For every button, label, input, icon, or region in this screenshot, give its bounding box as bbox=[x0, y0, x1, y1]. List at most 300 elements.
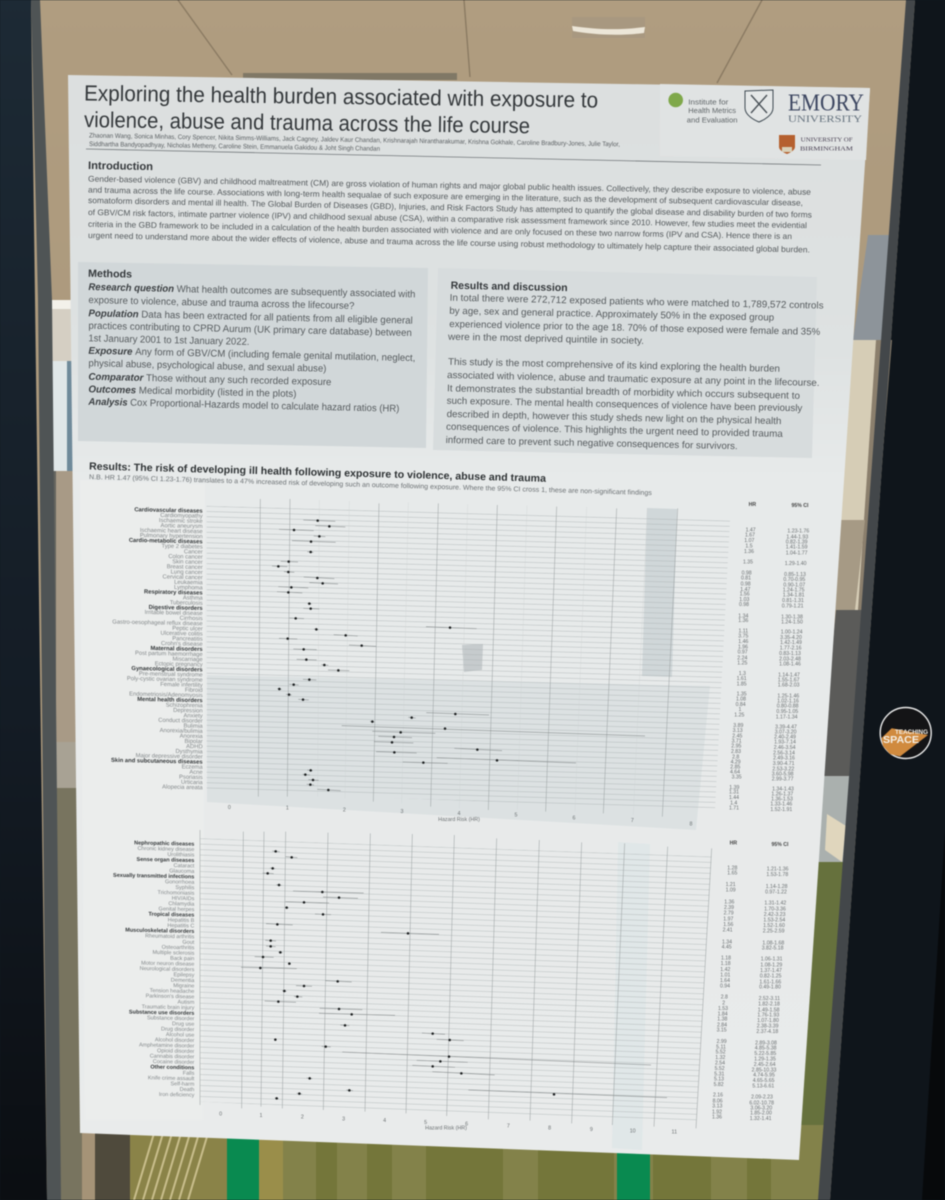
plot 2 outcome labels: Self-harm bbox=[170, 1081, 195, 1088]
text block: introduction: urgent need to understand more about the wider effects of violence, abuse and trauma across the life course using robust methodology to ultimately help capture their associated global burden. bbox=[88, 231, 810, 254]
plot 2 CI column: 2.45-2.64 bbox=[754, 1062, 776, 1068]
text block: results: associated with violence, abuse and traumatic exposure at any point in the lifecourse. bbox=[447, 370, 820, 389]
plot 1 HR column: 1.44 bbox=[729, 795, 739, 801]
plot 2 outcome labels: Musculoskeletal disorders bbox=[125, 928, 194, 935]
plot 1 HR column: 4.29 bbox=[731, 760, 741, 766]
plot 1 CI column: 1.24-1.75 bbox=[783, 588, 805, 594]
plot 1 vertical grid bbox=[258, 499, 678, 817]
plot 2 outcome labels: Trichomoniasis bbox=[158, 890, 195, 897]
plot 1 outcome labels: Ischaemic heart disease bbox=[140, 528, 203, 535]
plot 2 x axis bbox=[219, 1111, 677, 1136]
plot 1 CI column: 1.00-1.24 bbox=[781, 630, 803, 636]
plot 2 outcome labels: Cataract bbox=[174, 863, 195, 870]
plot 1 outcome labels: Aortic aneurysm bbox=[161, 523, 203, 530]
plot 2 HR column: 1.56 bbox=[723, 922, 733, 928]
logo: Institute for Health Metrics and Evaluation: Institute for bbox=[688, 98, 729, 107]
plot 2 outcome labels: Substance use disorders bbox=[129, 1009, 194, 1017]
text block: methods: Analysis Cox Proportional-Hazards model to calculate hazard ratios (HR) bbox=[87, 397, 400, 415]
heading: Introduction: Introduction bbox=[88, 160, 153, 173]
plot 2 CI column: 5.13-6.61 bbox=[752, 1083, 774, 1089]
text block: introduction: Gender-based violence (GBV) and childhood maltreatment (CM) are gross violation of human rights and major global public health issues. Collectively, they describe exposure to violence, abuse bbox=[88, 175, 811, 197]
plot 2 CI column: 1.08-1.68 bbox=[762, 940, 784, 946]
plot 1 outcome labels: Cervical cancer bbox=[162, 574, 203, 581]
text block: results: experienced violence prior to the age 18. 70% of those exposed were female and 35% bbox=[449, 319, 821, 338]
title: Exploring the health burden associated with exposure to bbox=[84, 81, 598, 112]
plot 2 CI column: 1.82-2.18 bbox=[758, 1002, 780, 1008]
plot 2 HR column: 0.94 bbox=[720, 984, 730, 990]
plot 1 outcome labels: ADHD bbox=[186, 744, 203, 750]
text block: results: This study is the most comprehensive of its kind exploring the health burden bbox=[448, 357, 780, 375]
plot 2 CI column: 2.09-2.23 bbox=[751, 1095, 773, 1101]
plot 1 CI column: 1.29-1.40 bbox=[785, 561, 807, 567]
heading: methods: Methods bbox=[88, 268, 132, 281]
plot 1 CI column: 2.56-3.14 bbox=[773, 750, 795, 756]
plot 2 HR column: 1.65 bbox=[727, 871, 737, 877]
plot 1 outcome labels: Endometriosis/Adenomyosis bbox=[129, 692, 203, 699]
text block: results: such exposure. The mental health consequences of violence have been previously bbox=[447, 396, 803, 414]
plot 1 CI column: 3.07-3.20 bbox=[775, 730, 797, 736]
plot 1 HR column: 2.24 bbox=[737, 655, 747, 661]
plot 2 HR column: 1.18 bbox=[721, 961, 731, 967]
plot 2 outcome labels: Parkinson's disease bbox=[146, 993, 194, 1000]
plot 2 HR column: 3.13 bbox=[712, 1104, 722, 1110]
plot 1 x axis: 4 bbox=[458, 811, 461, 817]
plot 1 CI column: 1.26-1.37 bbox=[771, 792, 793, 798]
plot 1 HR column: 1.35 bbox=[737, 691, 747, 697]
logo: University of Birmingham: UNIVERSITY OF bbox=[801, 136, 853, 144]
plot 1 outcome labels: Poly-cystic ovarian syndrome bbox=[127, 676, 203, 684]
plot 1 outcome labels: Pulmonary hypertension bbox=[140, 533, 203, 540]
plot 1 HR column: 1.03 bbox=[739, 597, 749, 603]
plot 1 outcome labels: Cardiomyopathy bbox=[160, 513, 203, 520]
plot 2 outcome labels: Neurological disorders bbox=[140, 966, 195, 973]
plot 2 outcome labels: Iron deficiency bbox=[159, 1092, 195, 1099]
plot 1 CI column: 1.36-1.53 bbox=[771, 797, 793, 803]
plot 1 outcome labels: Colon cancer bbox=[168, 554, 203, 561]
text block: methods: practices contributing to CPRD Aurum (UK primary care database) between bbox=[88, 321, 412, 339]
plot 2 outcome labels: Knife crime assault bbox=[148, 1075, 195, 1082]
plot 1 outcome labels: Type 2 diabetes bbox=[162, 544, 203, 551]
plot 1 HR column: 1.25 bbox=[734, 712, 744, 718]
plot 2 HR column: 5.82 bbox=[714, 1082, 724, 1088]
plot 1 outcome labels: Leukaemia bbox=[174, 580, 203, 586]
plot 2 outcome labels: Multiple sclerosis bbox=[152, 950, 195, 957]
plot 1 outcome labels: Ischaemic stroke bbox=[159, 518, 203, 525]
plot 1 outcome labels: Cirrhosis bbox=[180, 616, 203, 622]
text block: methods: physical abuse, psychological abuse, and sexual abuse) bbox=[88, 358, 327, 375]
plot 2 HR column: 1.18 bbox=[721, 955, 731, 961]
plot 1 outcome labels: Gynaecological disorders bbox=[131, 666, 203, 673]
plot 1 outcome labels: Bipolar bbox=[185, 739, 203, 745]
plot 1 CI column: 2.03-2.48 bbox=[779, 656, 801, 662]
plot 2 HR column: 1.53 bbox=[718, 1006, 728, 1012]
plot 2 x axis: 1 bbox=[260, 1113, 263, 1119]
plot 1 outcome labels: Skin and subcutaneous diseases bbox=[111, 758, 203, 766]
plot 2 HR column: 1.38 bbox=[717, 1017, 727, 1023]
logo: Emory University: UNIVERSITY bbox=[788, 115, 862, 125]
plot 2 CI column: 2.37-4.18 bbox=[756, 1029, 778, 1035]
plot 2 HR column: 1.09 bbox=[726, 888, 736, 894]
plot 1 CI column: 2.40-2.49 bbox=[774, 734, 796, 740]
plot 2 outcome labels: HIV/AIDs bbox=[172, 896, 195, 902]
forest plot 2 bbox=[113, 830, 789, 1136]
plot 1 outcome labels: Acne bbox=[189, 770, 203, 776]
plot 1 CI column: 1.25-1.46 bbox=[777, 693, 799, 699]
plot 1 outcome labels: Mental health disorders bbox=[137, 697, 203, 704]
plot 1 HR column: 4.64 bbox=[730, 769, 740, 775]
plot 1 CI column: 1.41-1.59 bbox=[786, 545, 808, 551]
plot 2 HR column: HR bbox=[730, 841, 737, 847]
heading: results plots: Results: The risk of developing ill health following exposure to violence, abuse and trauma bbox=[89, 462, 546, 485]
plot 1 HR column: 1 bbox=[739, 707, 742, 713]
plot 1 CI column: 1.44-1.93 bbox=[786, 534, 808, 540]
sticker: Teaching Space: TEACHING bbox=[895, 729, 928, 736]
plot 1 outcome labels: Pancreatitis bbox=[172, 636, 203, 643]
plot 1 outcome labels: Lung cancer bbox=[171, 569, 203, 576]
plot 1 CI column: 1.93-7.14 bbox=[774, 740, 796, 746]
plot 2 outcome labels: Death bbox=[180, 1087, 194, 1093]
plot 1 CI column: 1.17-1.34 bbox=[776, 714, 798, 720]
plot 1 HR column: 1.5 bbox=[745, 544, 753, 550]
plot 1 HR column: 0.84 bbox=[736, 702, 746, 708]
plot 1 CI column: 3.60-5.98 bbox=[772, 771, 794, 777]
plot 1 HR column: 1.34 bbox=[738, 614, 748, 620]
plot 2 HR column: 5.13 bbox=[714, 1077, 724, 1083]
plot 1 outcome labels: Alopecia areata bbox=[162, 784, 203, 791]
plot 2 HR column: 5.31 bbox=[714, 1071, 724, 1077]
plot 2 x axis: 11 bbox=[672, 1130, 677, 1136]
plot 1 CI column: 2.99-3.77 bbox=[772, 776, 794, 782]
text block: introduction bbox=[88, 175, 812, 254]
plot 2 outcome labels: Gout bbox=[182, 940, 195, 946]
plot 1 outcome labels: Eczema bbox=[182, 764, 203, 771]
plot 1 outcome labels: Ectopic pregnancy bbox=[155, 661, 203, 668]
plot 1 HR column: 1.35 bbox=[743, 560, 753, 566]
text block: introduction: somatoform disorders and mental ill health. The Global Burden of Diseases (GBD), Injuries, and Risk Factors Study has attempted to quantify the global disease and disability burden of two forms bbox=[88, 196, 812, 220]
plot 1 CI column: 1.52-1.91 bbox=[770, 807, 792, 813]
plot 2 x axis: 5 bbox=[424, 1120, 427, 1126]
plot 2 HR column: 1.42 bbox=[720, 967, 730, 973]
plot 1 CI column: 1.08-1.46 bbox=[779, 662, 801, 668]
forest plot 1 bbox=[111, 499, 809, 827]
plot 2 outcome labels: Epilepsy bbox=[174, 972, 195, 979]
plot 2 CI column: 1.14-1.28 bbox=[766, 884, 788, 890]
panel: results and discussion bbox=[433, 268, 824, 458]
plot 1 CI column: 0.70-0.95 bbox=[783, 577, 805, 583]
plot 1 x axis: 8 bbox=[690, 821, 693, 827]
plot 2 outcome labels: Hepatitis B bbox=[168, 918, 195, 924]
plot 2 CI column: 0.82-1.25 bbox=[760, 974, 782, 980]
plot 1 outcome labels: Tuberculosis bbox=[170, 600, 203, 607]
plot 1 CI column: 3.90-4.71 bbox=[773, 761, 795, 767]
plot 1 HR column: 1.39 bbox=[729, 785, 739, 791]
title bbox=[84, 81, 598, 138]
text block: methods: Research question What health outcomes are subsequently associated with bbox=[88, 282, 415, 300]
plot 1 x axis: 3 bbox=[401, 809, 404, 815]
plot 2 x axis: 0 bbox=[219, 1111, 222, 1117]
plot 2 outcome labels: Alcohol use bbox=[166, 1032, 194, 1039]
plot 2 CI column: 1.32-1.41 bbox=[750, 1116, 772, 1122]
plot 2 x axis: 4 bbox=[383, 1118, 386, 1124]
plot 1 HR column: 1.47 bbox=[740, 587, 750, 593]
plot 1 outcome labels: Lymphoma bbox=[174, 585, 203, 592]
text block: methods: Exposure Any form of GBV/CM (including female genital mutilation, neglect, bbox=[88, 346, 415, 364]
plot 1 HR column: 0.98 bbox=[741, 581, 751, 587]
plot 1 outcome labels: Peptic ulcer bbox=[172, 626, 203, 633]
plot 1 outcome labels: Anorexia bbox=[180, 734, 203, 740]
plot 1 CI column: 95% CI bbox=[792, 503, 809, 509]
plot 1 outcome labels: Cardiovascular diseases bbox=[134, 507, 203, 515]
plot 2 outcome labels: Tension headache bbox=[150, 988, 194, 995]
plot 2 CI column: 1.21-1.36 bbox=[767, 867, 789, 873]
plot 2 CI column: 4.85-5.38 bbox=[755, 1046, 777, 1052]
plot 1 CI column: 1.42-1.49 bbox=[780, 640, 802, 646]
plot 1 outcome labels: Depression bbox=[173, 708, 203, 714]
plot 2 outcome labels: Motor neuron disease bbox=[141, 961, 194, 968]
plot 1 HR column: 1.46 bbox=[738, 639, 748, 645]
plot 1 CI column: 0.90-1.07 bbox=[783, 582, 805, 588]
plot 1 HR column: 0.81 bbox=[741, 575, 751, 581]
plot 1 CI column: 3.35-4.20 bbox=[780, 635, 802, 641]
plot 1 outcome labels: Anxiety bbox=[184, 713, 203, 720]
logo: Institute for Health Metrics and Evaluation: and Evaluation bbox=[687, 116, 738, 124]
plot 1 outcome labels: Bulimia bbox=[184, 723, 203, 730]
text block: results: described in depth, however this study sheds new light on the physical health bbox=[447, 409, 781, 427]
plot 1 HR column: 2.8 bbox=[732, 754, 739, 760]
plot 1 CI column: 0.85-1.13 bbox=[784, 572, 806, 578]
plot 1 HR column: HR bbox=[749, 502, 756, 508]
plot 1 HR column: 1.07 bbox=[744, 538, 754, 544]
plot 2 outcome labels: Sexually transmitted infections bbox=[113, 873, 194, 880]
plot 1 CI column: 0.80-0.88 bbox=[777, 704, 799, 710]
plot 1 HR column: 1.31 bbox=[729, 790, 739, 796]
plot 1 HR column: 1.61 bbox=[737, 676, 747, 682]
plot 1 outcome labels: Skin cancer bbox=[172, 559, 203, 566]
plot 2 outcome labels: Osteoarthritis bbox=[162, 945, 195, 951]
plot 2 CI column: 2.25-2.59 bbox=[763, 928, 785, 934]
authors: Siddhartha Bandyopadhyay, Nicholas Metheny, Caroline Stein, Emmanuela Gakidou & Joht Singh Chandan bbox=[89, 141, 380, 153]
plot 2 CI column: 1.70-3.36 bbox=[764, 906, 786, 912]
plot 1 CI column: 0.83-1.13 bbox=[779, 651, 801, 657]
plot 1 HR column: 2.45 bbox=[732, 733, 742, 739]
plot 1 HR column: 1.36 bbox=[738, 618, 748, 624]
plot 2 CI column: 1.06-1.31 bbox=[761, 957, 783, 963]
plot 1 outcome labels: Asthma bbox=[183, 595, 203, 602]
plot 1 x axis: 0 bbox=[228, 805, 231, 811]
text block: methods: Outcomes Medical morbidity (listed in the plots) bbox=[88, 384, 297, 400]
plot 1 CI column: 0.79-1.21 bbox=[782, 603, 804, 609]
plot 2 outcome labels: Hepatitis C bbox=[167, 923, 194, 930]
plot 2 outcome labels: Syphilis bbox=[175, 885, 195, 891]
plot 1 outcome labels: Cancer bbox=[184, 549, 203, 556]
plot 2 confidence interval whiskers bbox=[241, 851, 667, 1099]
plot 2 HR column: 2.54 bbox=[715, 1060, 725, 1066]
plot 2 CI column: 1.31-1.42 bbox=[764, 901, 786, 907]
plot 2 outcome labels: Falls bbox=[183, 1071, 195, 1077]
text block: introduction: of GBV/CM risk factors, intimate partner violence (IPV) and childhood sexual abuse (CSA), within a comparative risk assessment framework since 2010. However, few studies meet the evidential bbox=[88, 208, 807, 230]
plot 1 CI column: 1.23-1.76 bbox=[787, 529, 809, 535]
logo: Institute for Health Metrics and Evaluation: Health Metrics bbox=[688, 106, 736, 115]
plot 1 outcome labels: Major depressive disorder bbox=[136, 753, 203, 761]
plot 2 outcome labels: Amphetamine disorder bbox=[139, 1042, 194, 1050]
plot 2 CI column: 3.06-3.20 bbox=[750, 1106, 772, 1112]
logo: Emory University: EMORY bbox=[788, 91, 864, 117]
plot 1 CI column: 1.33-1.46 bbox=[770, 802, 792, 808]
plot 2 CI column: 0.97-1.22 bbox=[765, 889, 787, 895]
plot 1 CI column: 0.82-1.39 bbox=[786, 540, 808, 546]
plot 2 HR column: 5.52 bbox=[715, 1066, 725, 1072]
plot 2 outcome labels: Back pain bbox=[170, 956, 194, 962]
plot 1 outcome labels: Schizophrenia bbox=[166, 703, 203, 709]
plot 2 CI column: 2.38-3.39 bbox=[757, 1024, 779, 1030]
plot 2 outcome labels: Genital herpes bbox=[159, 906, 195, 913]
text block: introduction: criteria in the GBD framework to be included in a calculation of the health burden associated with violence and are only focused on these two narrow forms (IPV and CSA). Hence there is an bbox=[88, 220, 792, 241]
plot 2 HR column: 5.52 bbox=[716, 1050, 726, 1056]
plot 2 outcome labels: Opioid disorder bbox=[157, 1048, 195, 1055]
plot 1 outcome labels: Respiratory diseases bbox=[144, 589, 203, 597]
plot 2 CI column: 6.02-10.78 bbox=[749, 1100, 774, 1106]
plot 1 outcome labels: Ulcerative colitis bbox=[161, 631, 203, 638]
plot 1 outcome labels: Psoriasis bbox=[179, 775, 203, 781]
plot 1 HR column: 1.08 bbox=[736, 697, 746, 703]
plot 2 HR column: 2.8 bbox=[721, 995, 728, 1001]
plot 1 HR column: 1.56 bbox=[740, 591, 750, 597]
plot 1 HR column: 2.85 bbox=[730, 764, 740, 770]
plot 2 CI column: 1.52-1.60 bbox=[763, 923, 785, 929]
plot 1 CI column: 1.24-1.50 bbox=[781, 619, 803, 625]
text block: methods: exposure to violence, abuse and trauma across the lifecourse? bbox=[88, 295, 355, 312]
plot 2 HR column: 1.21 bbox=[726, 882, 736, 888]
plot 2 outcome labels: Cannabis disorder bbox=[150, 1054, 194, 1060]
logo: University of Birmingham: BIRMINGHAM bbox=[800, 146, 853, 152]
plot 1 outcome labels: Cardio-metabolic diseases bbox=[129, 538, 203, 545]
plot 2 outcome labels: Gonorrhoea bbox=[165, 879, 195, 886]
authors: Zhaonan Wang, Sonica Minhas, Cory Spencer, Nikita Simms-Williams, Jack Cagney, Jaldev Kaur Chandan, Krishnarajah Nirantharakumar, Krishna Gokhale, Caroline Bradbury-Jones, Julie Taylor, bbox=[89, 133, 620, 148]
plot 1 outcome labels: Conduct disorder bbox=[158, 718, 203, 725]
plot 1 CI column: 3.39-4.47 bbox=[775, 724, 797, 730]
plot 2 outcome labels: Dementia bbox=[171, 978, 195, 984]
plot 2 outcome labels: Nephropathic diseases bbox=[134, 840, 194, 848]
plot 1 CI column: 1.30-1.38 bbox=[781, 614, 803, 620]
plot 2 hazard ratio markers bbox=[260, 851, 554, 1098]
plot 2 outcome labels: Glaucoma bbox=[169, 868, 195, 875]
text block: methods: Comparator Those without any such recorded exposure bbox=[88, 372, 332, 388]
plot 2 HR column: 2 bbox=[722, 1000, 725, 1006]
title: violence, abuse and trauma across the life course bbox=[84, 107, 530, 138]
plot 2 CI column: 2.85-10.33 bbox=[752, 1067, 776, 1073]
plot 1 HR column: 1.25 bbox=[737, 660, 747, 666]
plot 2 vertical grid bbox=[200, 830, 712, 1128]
plot 2 HR column: 1.36 bbox=[712, 1114, 722, 1120]
plot 2 outcome labels: Urolithiasis bbox=[167, 852, 195, 859]
plot 2 HR column: 2.41 bbox=[723, 927, 733, 933]
plot 1 HR column: 2.95 bbox=[731, 744, 741, 750]
plot 2 outcome labels: Drug disorder bbox=[161, 1026, 194, 1033]
plot 1 x axis: 7 bbox=[631, 818, 634, 824]
text block: results: informed care to prevent such negative consequences for survivors. bbox=[446, 435, 738, 452]
plot 2 HR column: 4.45 bbox=[722, 945, 732, 951]
plot 1 CI column: 2.46-3.54 bbox=[774, 745, 796, 751]
plot 1 CI column: 2.53-3.22 bbox=[772, 766, 794, 772]
plot 1 CI column: 1.34-1.43 bbox=[772, 787, 794, 793]
plot 1 HR column: 3.35 bbox=[732, 775, 742, 781]
plot 1 outcome labels: Fibroid bbox=[185, 688, 203, 694]
text block: results: It demonstrates the substantial breadth of morbidity which occurs subsequent to bbox=[447, 383, 800, 402]
plot 2 outcome labels: Chlamydia bbox=[168, 901, 195, 908]
plot 2 outcome labels: Sense organ diseases bbox=[137, 857, 194, 864]
plot 2 CI column: 1.37-1.47 bbox=[760, 968, 782, 974]
plot 1 x axis: 2 bbox=[343, 808, 346, 814]
plot 2 HR column: 1.34 bbox=[722, 939, 732, 945]
plot 2 CI column: 1.61-1.66 bbox=[759, 979, 781, 985]
plot 1 HR column: 1.47 bbox=[746, 527, 756, 533]
panel: methods bbox=[78, 262, 428, 448]
plot 2 CI column: 1.29-1.35 bbox=[754, 1056, 776, 1062]
plot 2 outcome labels: Other conditions bbox=[150, 1064, 194, 1071]
plot 1 HR column: 2.83 bbox=[731, 749, 741, 755]
plot 1 CI column: 0.81-1.31 bbox=[782, 598, 804, 604]
plot 2 CI column: 1.08-1.29 bbox=[760, 962, 782, 968]
plot 2 CI column: 95% CI bbox=[772, 842, 789, 848]
plot 1 HR column: 1.67 bbox=[745, 533, 755, 539]
plot 1 HR column: 3.75 bbox=[738, 634, 748, 640]
plot 1 HR column: 1.4 bbox=[730, 800, 737, 806]
plot 1 HR column: 1.3 bbox=[739, 671, 746, 677]
plot 2 HR column: 8.06 bbox=[713, 1098, 723, 1104]
plot 1 outcome labels: Female infertility bbox=[160, 682, 203, 689]
plot 2 CI column: 3.82-5.18 bbox=[762, 946, 784, 952]
plot 2 CI column: 1.49-1.58 bbox=[758, 1007, 780, 1013]
plot 2 x axis: Hazard Risk (HR) bbox=[425, 1126, 467, 1132]
background: right reflections bbox=[790, 235, 892, 1200]
background: left window strip bbox=[46, 300, 82, 1200]
plot 2 x axis: 7 bbox=[507, 1124, 510, 1130]
plot 2 x axis: 8 bbox=[548, 1125, 551, 1131]
plot 1 outcome labels: Anorexia/bulimia bbox=[160, 728, 203, 735]
plot 2 HR column: 1.97 bbox=[723, 916, 733, 922]
plot 1 x axis: 1 bbox=[286, 806, 289, 812]
plot 2 x axis: 9 bbox=[590, 1127, 593, 1133]
plot 2 x axis: 6 bbox=[465, 1122, 468, 1128]
text block: results: were in the most deprived quintile in society. bbox=[447, 332, 644, 347]
plot 1 CI column: 0.95-1.05 bbox=[776, 709, 798, 715]
poster sheet bbox=[68, 75, 870, 1160]
logo: Emory University bbox=[745, 90, 864, 125]
text block: results bbox=[446, 293, 824, 452]
text block: methods: 1st January 2001 to 1st January 2022. bbox=[88, 333, 250, 348]
plot 1 outcome labels: Post partum haemorrhage bbox=[135, 651, 203, 658]
plot 2 CI column: 4.74-5.95 bbox=[753, 1073, 775, 1079]
text block: results: by age, sex and general practice. Approximately 50% in the exposed group bbox=[449, 306, 774, 324]
plot 2 CI column: 1.53-2.54 bbox=[763, 917, 785, 923]
plot 1 CI column: 1.34-1.81 bbox=[783, 593, 805, 599]
plot 1 outcome labels: Miscarriage bbox=[173, 657, 203, 663]
plot 2 HR column: 1.36 bbox=[724, 899, 734, 905]
plot 1 CI column: 1.77-2.16 bbox=[780, 646, 802, 652]
plot 2 CI column: 2.52-3.11 bbox=[759, 996, 780, 1002]
text block: methods: Population Data has been extracted for all patients from all eligible general bbox=[88, 308, 413, 327]
header divider bbox=[86, 149, 821, 165]
plot 1 HR column: 3.71 bbox=[732, 739, 742, 745]
text block: introduction: and trauma across the life course. Associations with long-term health sequalae of such exposure are emerging in the literature, such as the development of subsequent cardiovascular disease, bbox=[88, 186, 803, 208]
logo: Institute for Health Metrics and Evaluation bbox=[668, 93, 738, 124]
plot 2 outcome labels: Traumatic brain injury bbox=[142, 1004, 195, 1011]
plot 1 CI column: 1.14-1.47 bbox=[778, 672, 800, 678]
plot 1 outcome labels: Irritable bowel disease bbox=[145, 610, 203, 617]
plot 2 CI column: 0.49-1.80 bbox=[759, 985, 781, 991]
plot 1 HR column: 1.85 bbox=[737, 681, 747, 687]
plot 1 HR column: 0.97 bbox=[738, 650, 748, 656]
